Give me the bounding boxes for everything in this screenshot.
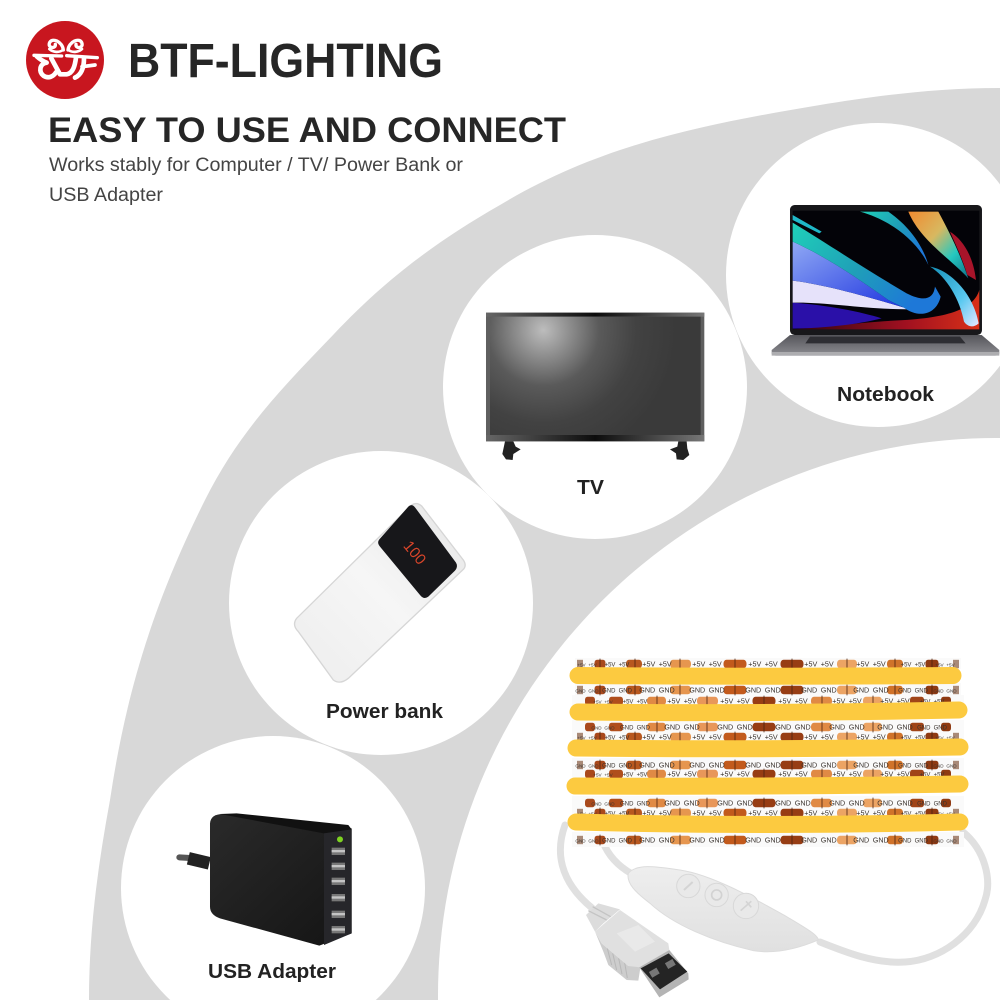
- label: notebook: Notebook: [837, 384, 935, 406]
- pad voltage markings: GND GND: [639, 760, 675, 770]
- pad voltage markings: +5V +5V: [692, 660, 722, 668]
- pad voltage markings: +5V +5V: [935, 736, 956, 740]
- pad voltage markings: GND GND: [775, 798, 811, 808]
- pad voltage markings: +5V +5V: [692, 732, 722, 742]
- pad voltage markings: GND GND: [664, 722, 700, 732]
- label: power bank: Power bank: [326, 701, 444, 723]
- pad voltage markings: +5V +5V: [804, 808, 834, 818]
- pad voltage markings: GND GND: [717, 722, 753, 732]
- icon: notebook laptop: [772, 205, 999, 356]
- pad voltage markings: +5V +5V: [901, 662, 925, 668]
- yellow COB light strips: [575, 676, 960, 824]
- pad voltage markings: +5V +5V: [778, 696, 808, 706]
- pad voltage markings: GND GND: [689, 836, 725, 844]
- pad voltage markings: GND GND: [829, 722, 865, 732]
- pad voltage markings: GND GND: [575, 764, 599, 768]
- pad voltage markings: +5V +5V: [577, 736, 598, 740]
- main heading: EASY TO USE AND CONNECT: [48, 111, 566, 150]
- pad voltage markings: GND GND: [745, 686, 781, 694]
- pad voltage markings: GND GND: [664, 798, 700, 808]
- icon: TV: [486, 313, 704, 460]
- pad voltage markings: +5V +5V: [748, 660, 778, 668]
- pad voltage markings: +5V +5V: [605, 812, 629, 818]
- pad voltage markings: GND GND: [717, 798, 753, 808]
- pad voltage markings: GND GND: [829, 798, 865, 808]
- pad voltage markings: GND GND: [898, 764, 929, 770]
- pad voltage markings: GND GND: [775, 722, 811, 732]
- pad voltage markings: +5V +5V: [920, 772, 944, 778]
- pad voltage markings: GND GND: [591, 802, 615, 806]
- white circle: notebook: [726, 123, 1000, 427]
- pad voltage markings: +5V +5V: [901, 812, 925, 818]
- white circle: TV: [443, 235, 747, 539]
- pad voltage markings: +5V +5V: [901, 736, 925, 742]
- pad voltage markings: GND GND: [917, 802, 948, 808]
- pad voltage markings: GND GND: [933, 838, 957, 844]
- pad voltage markings: GND GND: [917, 726, 948, 732]
- pad voltage markings: GND GND: [575, 688, 599, 694]
- pad voltage markings: +5V +5V: [667, 770, 697, 778]
- pad voltage markings: GND GND: [745, 760, 781, 770]
- pad voltage markings: GND GND: [602, 764, 633, 770]
- pad voltage markings: GND GND: [620, 726, 651, 732]
- pad voltage markings: GND GND: [853, 836, 889, 844]
- pad voltage markings: +5V +5V: [880, 770, 910, 778]
- pad voltage markings: GND GND: [602, 838, 633, 844]
- label: TV: TV: [577, 477, 605, 499]
- pad voltage markings: GND GND: [877, 798, 913, 808]
- cables: [560, 825, 988, 962]
- pad voltage markings: [575, 660, 957, 844]
- pad voltage markings: GND GND: [602, 688, 633, 694]
- power bank display reading: 100: [400, 538, 429, 568]
- pad voltage markings: GND GND: [575, 838, 599, 844]
- pad voltage markings: +5V +5V: [577, 662, 598, 668]
- pad voltage markings: +5V +5V: [778, 770, 808, 778]
- pad voltage markings: GND GND: [933, 688, 957, 694]
- icon: power bank: [295, 504, 465, 682]
- pad voltage markings: GND GND: [801, 686, 837, 694]
- pad voltage markings: +5V +5V: [935, 812, 956, 816]
- pad voltage markings: +5V +5V: [804, 732, 834, 742]
- pad voltage markings: GND GND: [853, 760, 889, 770]
- pad voltage markings: GND GND: [689, 760, 725, 770]
- pad voltage markings: GND GND: [639, 836, 675, 844]
- pad voltage markings: +5V +5V: [692, 808, 722, 818]
- pad voltage markings: +5V +5V: [920, 700, 944, 706]
- pad voltage markings: +5V +5V: [832, 770, 862, 778]
- pad voltage markings: +5V +5V: [623, 772, 647, 778]
- pad voltage markings: GND GND: [639, 686, 675, 694]
- pad voltage markings: +5V +5V: [593, 700, 614, 704]
- pad voltage markings: +5V +5V: [856, 732, 886, 742]
- pad voltage markings: +5V +5V: [880, 696, 910, 706]
- pad voltage markings: +5V +5V: [720, 696, 750, 706]
- pad voltage markings: +5V +5V: [577, 812, 598, 816]
- white PCB bands: [572, 658, 964, 847]
- LED strip with dimmer cable: [560, 658, 988, 997]
- pad voltage markings: +5V +5V: [667, 696, 697, 706]
- pad voltage markings: GND GND: [689, 686, 725, 694]
- subtitle line two: USB Adapter: [49, 185, 164, 206]
- pad voltage markings: GND GND: [898, 838, 929, 844]
- dimmer controller: [628, 867, 818, 952]
- pad voltage markings: GND GND: [801, 760, 837, 770]
- pad voltage markings: GND GND: [591, 726, 615, 730]
- USB plug: [586, 903, 689, 997]
- pad voltage markings: GND GND: [898, 688, 929, 694]
- pad voltage markings: GND GND: [877, 722, 913, 732]
- pad voltage markings: +5V +5V: [593, 772, 614, 778]
- subtitle line one: Works stably for Computer / TV/ Power Bank or: [49, 155, 464, 176]
- pad voltage markings: +5V +5V: [832, 696, 862, 706]
- pad voltage markings: +5V +5V: [856, 660, 886, 668]
- label: USB adapter: USB Adapter: [208, 961, 336, 983]
- pad voltage markings: GND GND: [933, 764, 957, 768]
- pad voltage markings: +5V +5V: [720, 770, 750, 778]
- pad voltage markings: GND GND: [853, 686, 889, 694]
- brand name: BTF-LIGHTING: [128, 35, 443, 88]
- pad voltage markings: GND GND: [745, 836, 781, 844]
- pad voltage markings: GND GND: [801, 836, 837, 844]
- pad voltage markings: +5V +5V: [804, 660, 834, 668]
- pad voltage markings: +5V +5V: [642, 732, 672, 742]
- white circle: power bank: [229, 451, 533, 755]
- pad voltage markings: +5V +5V: [605, 662, 629, 668]
- pad voltage markings: GND GND: [620, 802, 651, 808]
- white circle: USB adapter: [121, 736, 425, 1000]
- pad voltage markings: +5V +5V: [748, 808, 778, 818]
- copper solder pads: [577, 659, 959, 845]
- pad voltage markings: +5V +5V: [642, 660, 672, 668]
- pad voltage markings: +5V +5V: [605, 736, 629, 742]
- icon: USB adapter: [179, 813, 352, 946]
- pad voltage markings: +5V +5V: [642, 808, 672, 818]
- pad voltage markings: +5V +5V: [856, 808, 886, 818]
- brand logo: red circle emblem: [26, 21, 104, 99]
- pad voltage markings: +5V +5V: [935, 662, 956, 668]
- pad voltage markings: +5V +5V: [623, 700, 647, 706]
- pad voltage markings: +5V +5V: [748, 732, 778, 742]
